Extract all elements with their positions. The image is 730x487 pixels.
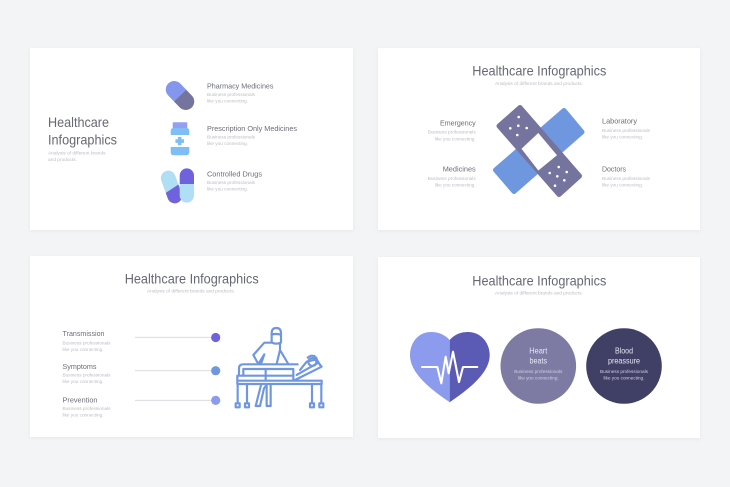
- heading: medicines panel: Healthcare: [48, 115, 109, 130]
- circle: blood pressure: [586, 328, 662, 404]
- text block: doctors: Doctors: [602, 164, 626, 173]
- text block: prescription only medicines: Business professionals: [207, 135, 256, 141]
- text block: pharmacy medicines: [207, 82, 274, 105]
- circle: blood pressure: Business professionals: [600, 369, 649, 375]
- text block: prescription only medicines: [207, 124, 297, 147]
- text block: symptoms: [62, 362, 111, 385]
- circle: heart beats: Business professionals: [514, 369, 563, 375]
- text block: medicines intro: [48, 150, 106, 163]
- text block: medicines: [428, 164, 476, 188]
- text block: controlled drugs: Business professionals: [207, 180, 256, 186]
- text block: symptoms: like you connecting.: [62, 379, 104, 385]
- text block: transmission: Transmission: [62, 329, 104, 338]
- panel: medicines: [30, 48, 353, 230]
- text block: controlled drugs: Controlled Drugs: [207, 169, 262, 178]
- text block: doctors: [602, 164, 651, 188]
- heading: heart panel: Healthcare Infographics: [472, 273, 606, 288]
- icon: heart with pulse: [410, 332, 490, 402]
- text block: transmission: Business professionals: [62, 341, 111, 347]
- text block: medicines intro: Analysis of different brands: [48, 150, 106, 156]
- circle: blood pressure: Blood: [615, 347, 633, 356]
- text block: heart subtitle: Analysis of different brands and products.: [495, 291, 583, 297]
- text block: medicines: Medicines: [443, 164, 476, 173]
- text block: laboratory: Laboratory: [602, 117, 637, 126]
- text block: bandage subtitle: Analysis of different brands and products.: [495, 81, 583, 87]
- circle: blood pressure: like you connecting.: [604, 376, 644, 382]
- icon: two capsules: [159, 168, 194, 205]
- text block: transmission: [62, 329, 111, 353]
- text block: emergency: [428, 118, 476, 142]
- text block: pharmacy medicines: Pharmacy Medicines: [207, 82, 274, 90]
- text block: medicines: Business professionals: [428, 176, 476, 182]
- circle: blood pressure: preassure: [608, 357, 640, 366]
- text block: prevention: Prevention: [62, 396, 98, 405]
- heading: medicines panel: Infographics: [48, 133, 117, 148]
- text block: laboratory: like you connecting.: [602, 134, 643, 140]
- text block: pharmacy medicines: Business professionals: [207, 92, 256, 98]
- text block: controlled drugs: like you connecting.: [207, 186, 248, 192]
- text block: medicines intro: and products.: [48, 157, 77, 163]
- text block: emergency: Business professionals: [428, 130, 476, 136]
- marker: prevention: [211, 396, 220, 405]
- text block: laboratory: Business professionals: [602, 128, 651, 134]
- text block: doctors: Business professionals: [602, 176, 651, 182]
- marker: transmission: [211, 333, 220, 342]
- panel: patient care: [30, 256, 353, 437]
- icon: medicine bottle: [171, 122, 189, 155]
- circle: heart beats: Heart: [529, 347, 548, 356]
- icon: capsule: [162, 78, 198, 113]
- panel: bandage: [378, 48, 700, 230]
- text block: controlled drugs: [207, 169, 262, 192]
- text block: pharmacy medicines: like you connecting.: [207, 99, 248, 105]
- heading: medicines panel: [48, 115, 117, 148]
- text block: prevention: [62, 396, 111, 418]
- text block: symptoms: Business professionals: [62, 372, 111, 378]
- panel: heart: [378, 257, 700, 438]
- text block: prevention: Business professionals: [62, 406, 111, 412]
- text block: prescription only medicines: like you connecting.: [207, 141, 248, 147]
- text block: medicines: like you connecting.: [435, 182, 476, 188]
- text block: patient care subtitle: Analysis of different brands and products.: [147, 289, 235, 295]
- icon: crossed bandage: [496, 108, 582, 194]
- text block: transmission: like you connecting.: [62, 347, 104, 353]
- text block: symptoms: Symptoms: [62, 362, 97, 371]
- circle: heart beats: [500, 328, 576, 404]
- text block: prescription only medicines: Prescription Only Medicines: [207, 124, 297, 133]
- marker: symptoms: [211, 366, 220, 375]
- heading: bandage panel: Healthcare Infographics: [472, 64, 606, 79]
- heading: patient care panel: Healthcare Infographics: [125, 271, 259, 286]
- circle: heart beats: beats: [530, 357, 547, 366]
- circle: heart beats: like you connecting.: [518, 376, 559, 382]
- text block: emergency: Emergency: [440, 118, 476, 127]
- text block: doctors: like you connecting.: [602, 182, 643, 188]
- text block: laboratory: [602, 117, 651, 140]
- icon: doctor and patient on bed: [236, 328, 323, 407]
- text block: emergency: like you connecting.: [435, 136, 476, 142]
- text block: prevention: like you connecting.: [62, 412, 104, 418]
